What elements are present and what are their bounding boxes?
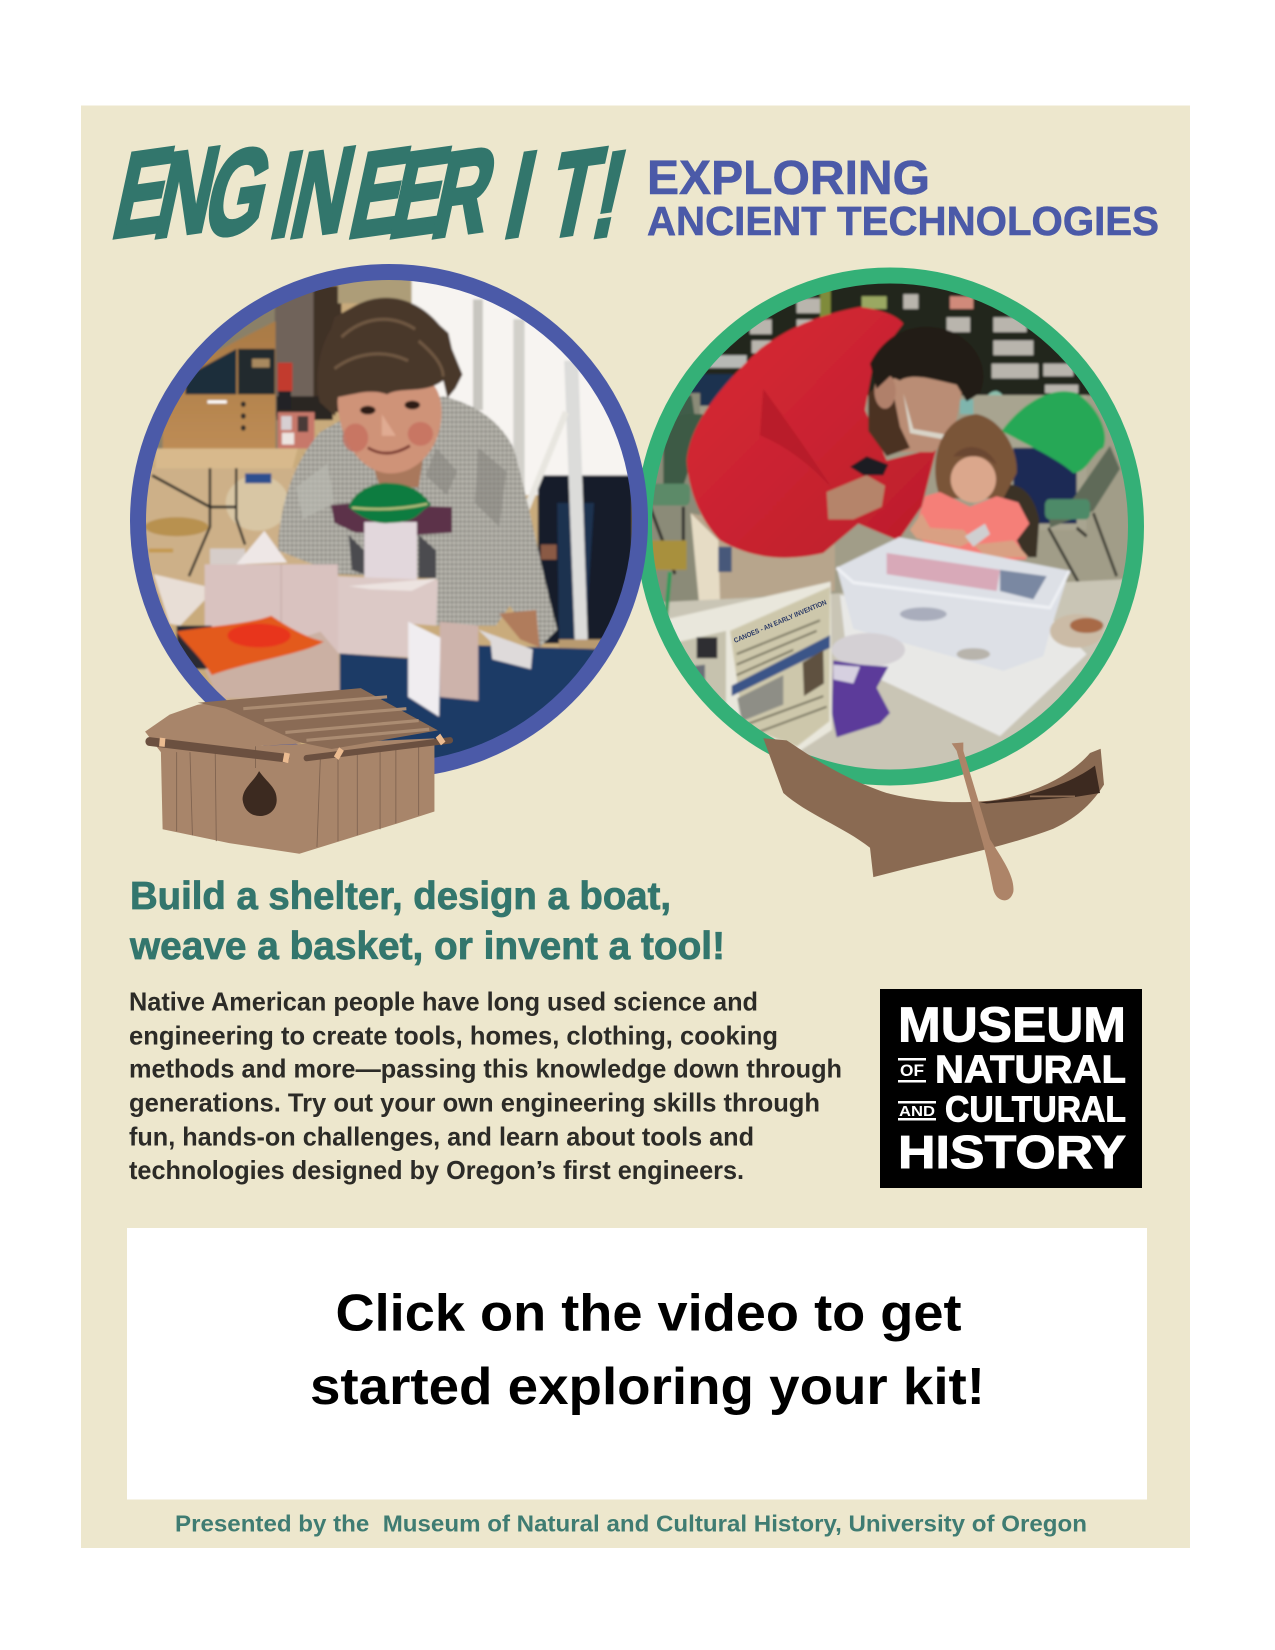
text block: description: generations. Try out your own engineering skills through — [129, 1088, 820, 1118]
pamphlet heading text: CANOES - AN EARLY INVENTION — [733, 599, 828, 645]
pants — [691, 513, 835, 606]
logo: Museum of Natural and Cultural History — [880, 989, 1142, 1188]
chairs — [677, 394, 696, 418]
girl — [935, 414, 1017, 498]
bean bags — [349, 483, 431, 523]
callout: white video box: started exploring your kit! — [310, 1358, 985, 1416]
footer: presented by: Presented by the Museum of Natural and Cultural History, University of Oregon — [175, 1511, 1087, 1537]
subtitle: Exploring Ancient Technologies: EXPLORING — [647, 152, 930, 205]
table — [664, 578, 1122, 770]
pennies — [1050, 614, 1103, 648]
callout: white video box: Click on the video to get — [336, 1285, 962, 1343]
title: Engineer It!: ENGINEER IT! — [97, 120, 646, 264]
cardboard box — [163, 321, 276, 448]
face — [338, 372, 442, 473]
text block: description — [129, 987, 842, 1185]
icon: canoe with paddle — [763, 738, 1104, 900]
cloth under bin — [840, 595, 1087, 736]
text block: description: Native American people have long used science and — [129, 987, 758, 1017]
panel: cream poster background — [81, 106, 1190, 1548]
heading: Build a shelter: Build a shelter, design a boat, — [130, 875, 671, 918]
logo: Museum of Natural and Cultural History: AND — [899, 1103, 935, 1120]
photo circle: father and daughter testing boats — [641, 268, 1144, 786]
heading: Build a shelter: weave a basket, or invent a tool! — [129, 925, 725, 968]
hair — [317, 298, 463, 416]
logo: Museum of Natural and Cultural History: NATURAL — [935, 1049, 1126, 1092]
clear bin — [837, 537, 1069, 671]
hand — [827, 475, 885, 519]
logo: Museum of Natural and Cultural History: HISTORY — [898, 1126, 1126, 1178]
father's head — [892, 375, 964, 454]
callout: white video box — [127, 1228, 1147, 1500]
subtitle: Exploring Ancient Technologies: ANCIENT TECHNOLOGIES — [647, 198, 1159, 244]
logo: Museum of Natural and Cultural History: OF — [900, 1061, 924, 1080]
hoodie — [687, 307, 937, 558]
text block: description: methods and more—passing this knowledge down through — [129, 1054, 842, 1084]
logo: Museum of Natural and Cultural History: CULTURAL — [945, 1089, 1126, 1130]
green straw — [666, 572, 670, 616]
logo: Museum of Natural and Cultural History: MUSEUM — [898, 999, 1126, 1053]
text block: description: engineering to create tools, homes, clothing, cooking — [129, 1020, 778, 1050]
purple cloth — [832, 660, 890, 737]
pamphlet — [662, 582, 832, 755]
table and floor — [145, 467, 310, 594]
heading: Build a shelter — [129, 875, 725, 968]
text block: description: technologies designed by Oregon’s first engineers. — [129, 1155, 744, 1185]
paper buildings — [154, 574, 205, 626]
background legs — [538, 475, 633, 643]
neck — [374, 460, 424, 489]
foil plate — [832, 633, 905, 667]
photo circle: boy with paper building — [130, 264, 648, 774]
window — [410, 281, 628, 496]
shirt — [278, 396, 557, 647]
icon: plank house — [145, 688, 450, 854]
text block: description: fun, hands-on challenges, and learn about tools and — [129, 1121, 754, 1151]
subtitle: Exploring Ancient Technologies — [647, 152, 1159, 244]
